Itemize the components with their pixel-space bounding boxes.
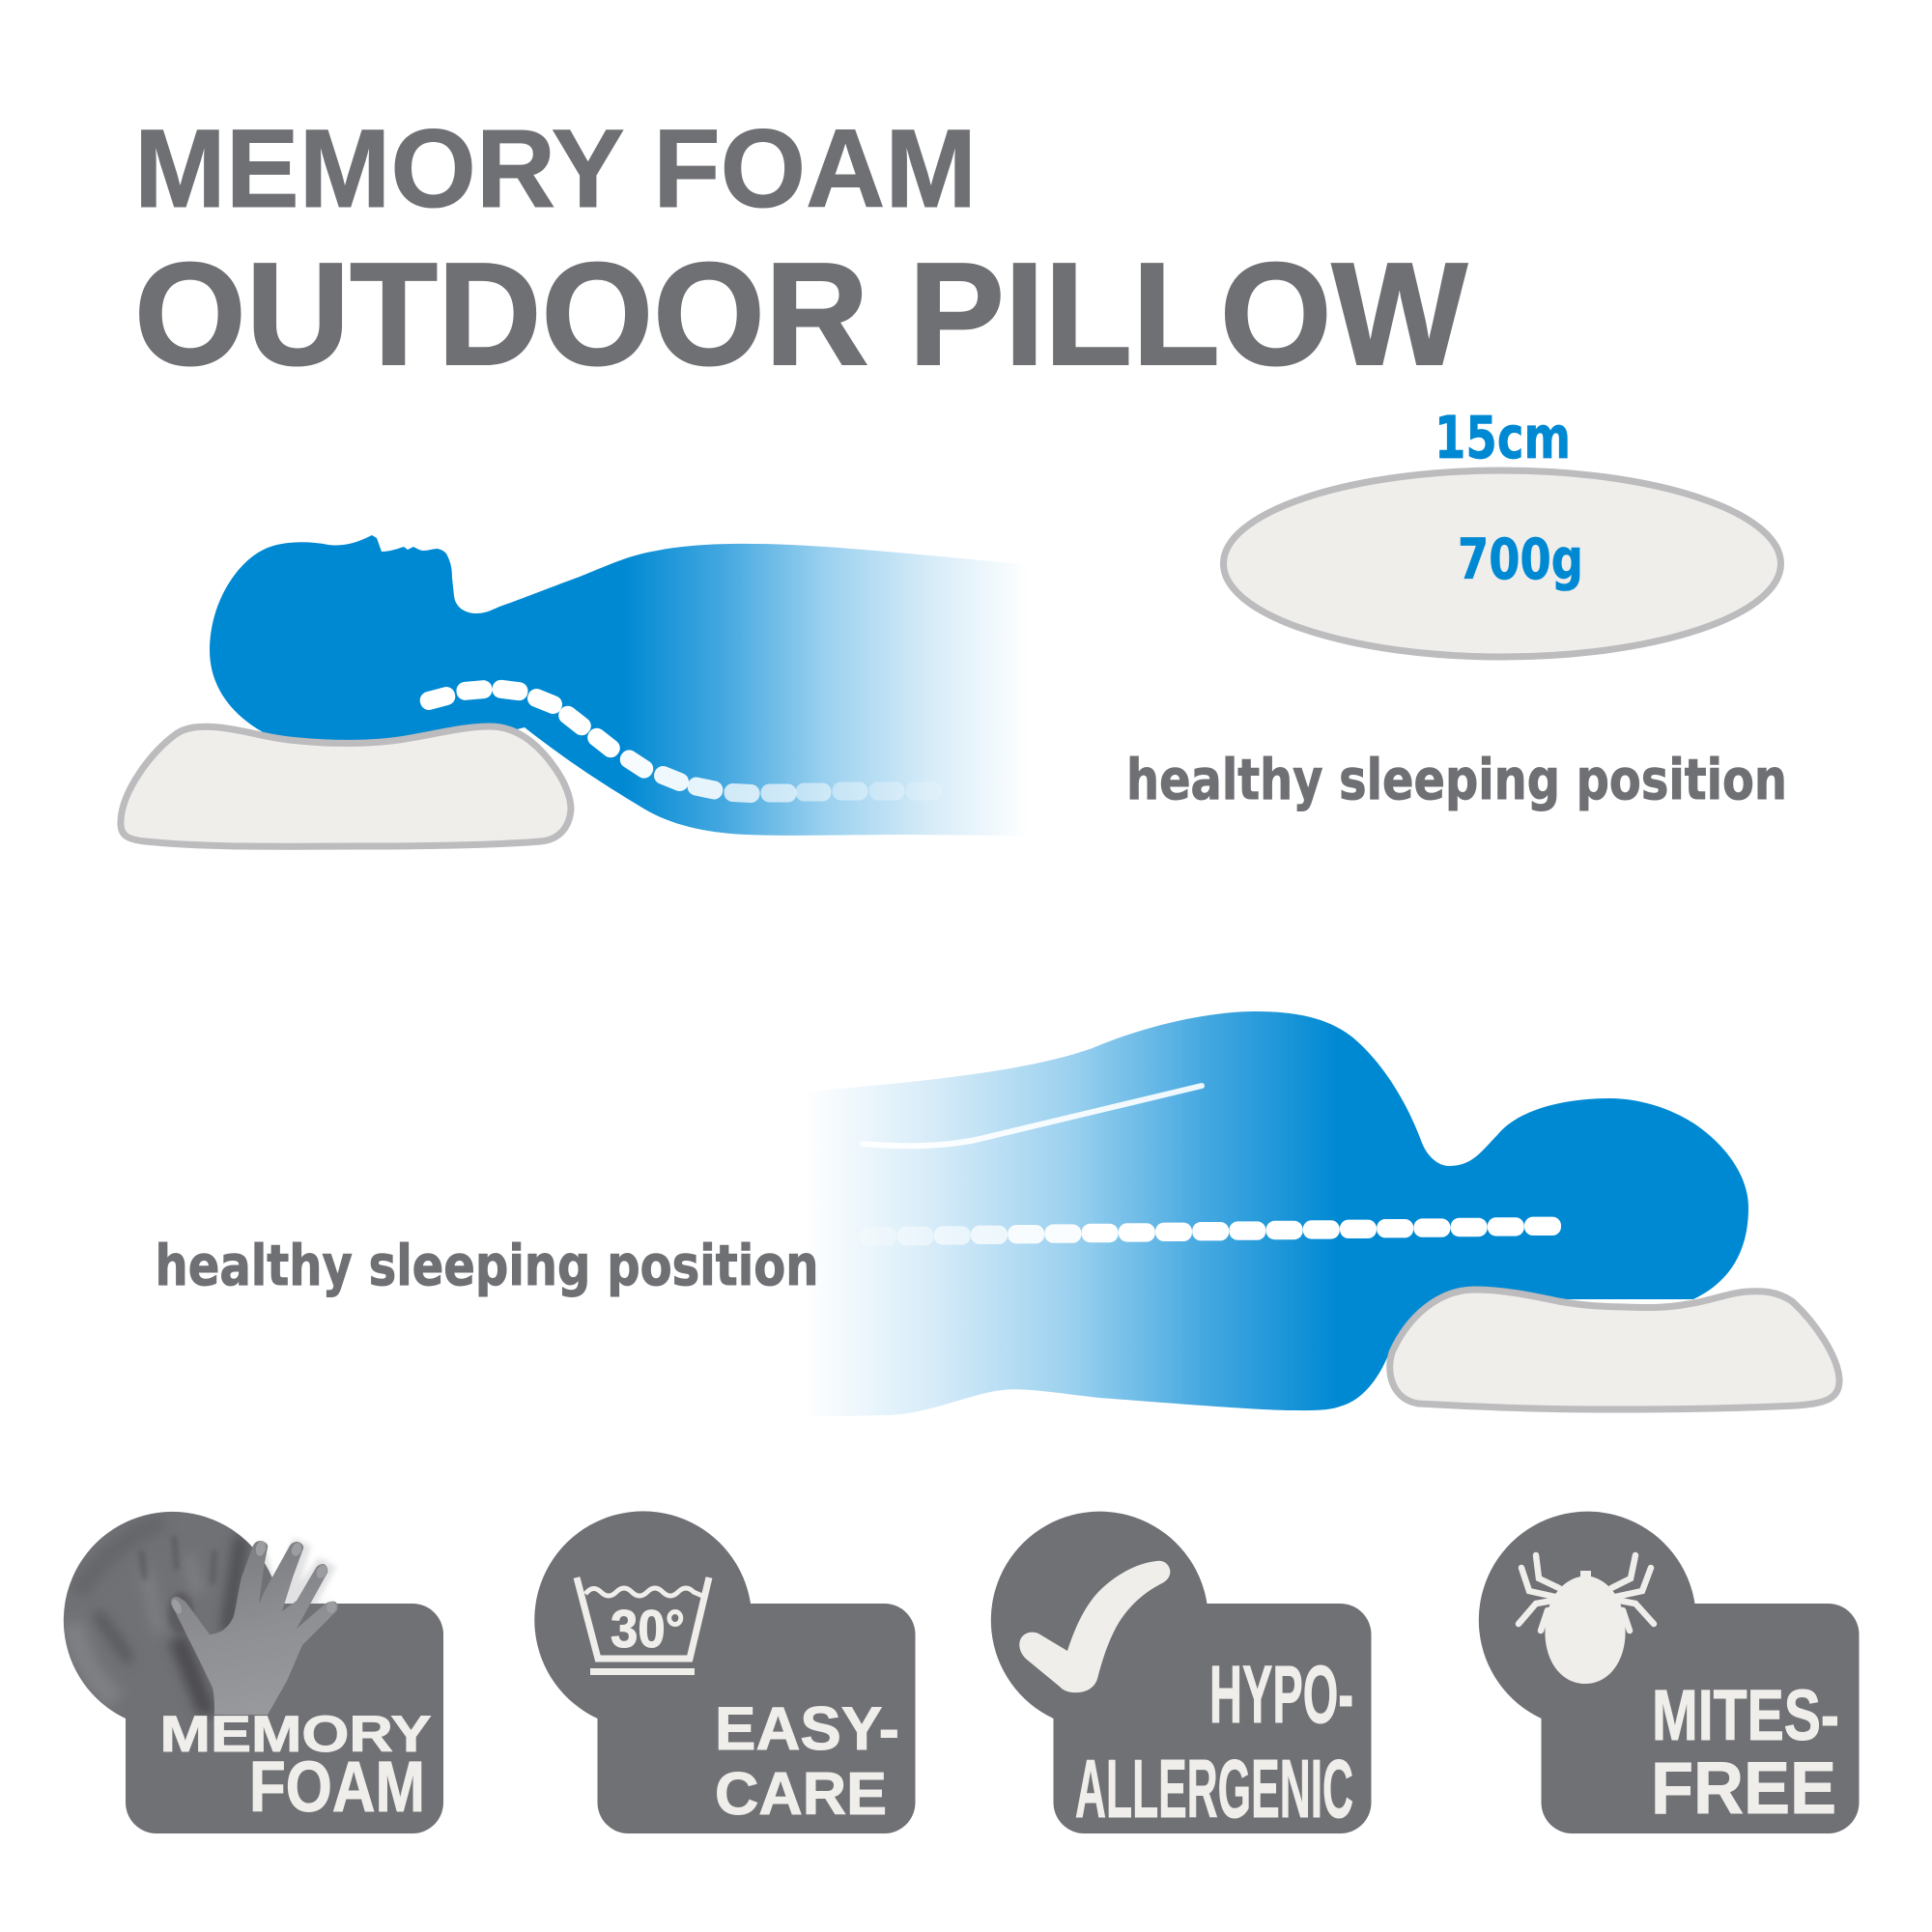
badge: mites free [1479, 1512, 1859, 1833]
spine side [860, 1217, 1561, 1246]
badge: easy care [534, 1511, 916, 1833]
body silhouette side [808, 1011, 1748, 1417]
label [160, 1706, 431, 1827]
label: CARE [715, 1761, 887, 1828]
pillow back [121, 726, 571, 846]
pillow top view [1223, 470, 1781, 657]
badge background [991, 1512, 1372, 1833]
icon: check mark [1019, 1561, 1170, 1692]
icon: wash tub 30 degrees: 30° [611, 1599, 685, 1659]
title line: outdoor pillow: OUTDOOR PILLOW [134, 232, 1467, 395]
label: ALLERGENIC [1075, 1744, 1353, 1835]
badge: hypoallergenic [991, 1512, 1372, 1835]
badge background [1479, 1512, 1859, 1833]
body silhouette back [210, 535, 1029, 836]
icon: wash tub 30 degrees [577, 1577, 709, 1675]
pillow dimensions [1223, 404, 1781, 657]
pillow side [1390, 1290, 1839, 1409]
width label: 15cm [1435, 404, 1571, 472]
foam hand imprint [72, 1521, 242, 1715]
label [1075, 1649, 1353, 1835]
figure: side sleeping position [808, 1011, 1839, 1417]
label: MITES- [1652, 1675, 1839, 1755]
title line: memory foam: MEMORY FOAM [134, 107, 977, 231]
hand shadow halo [261, 1538, 336, 1633]
badge background [534, 1511, 916, 1833]
label: HYPO- [1209, 1649, 1353, 1740]
label: EASY- [715, 1695, 899, 1763]
label [715, 1695, 899, 1828]
label: MEMORY [160, 1706, 431, 1763]
label: FOAM [249, 1747, 425, 1827]
badge: memory foam [64, 1512, 443, 1833]
icon: mite [1519, 1555, 1654, 1684]
badge background [64, 1512, 443, 1833]
label: FREE [1651, 1747, 1836, 1830]
arm line [863, 1086, 1202, 1146]
label [1651, 1675, 1839, 1830]
hand [170, 1540, 338, 1715]
caption left: healthy sleeping position [155, 1233, 819, 1298]
title [134, 107, 1467, 395]
figure: back sleeping position [121, 535, 1029, 846]
spine back [418, 679, 941, 803]
caption right: healthy sleeping position [1126, 747, 1787, 812]
weight label: 700g [1458, 526, 1583, 592]
